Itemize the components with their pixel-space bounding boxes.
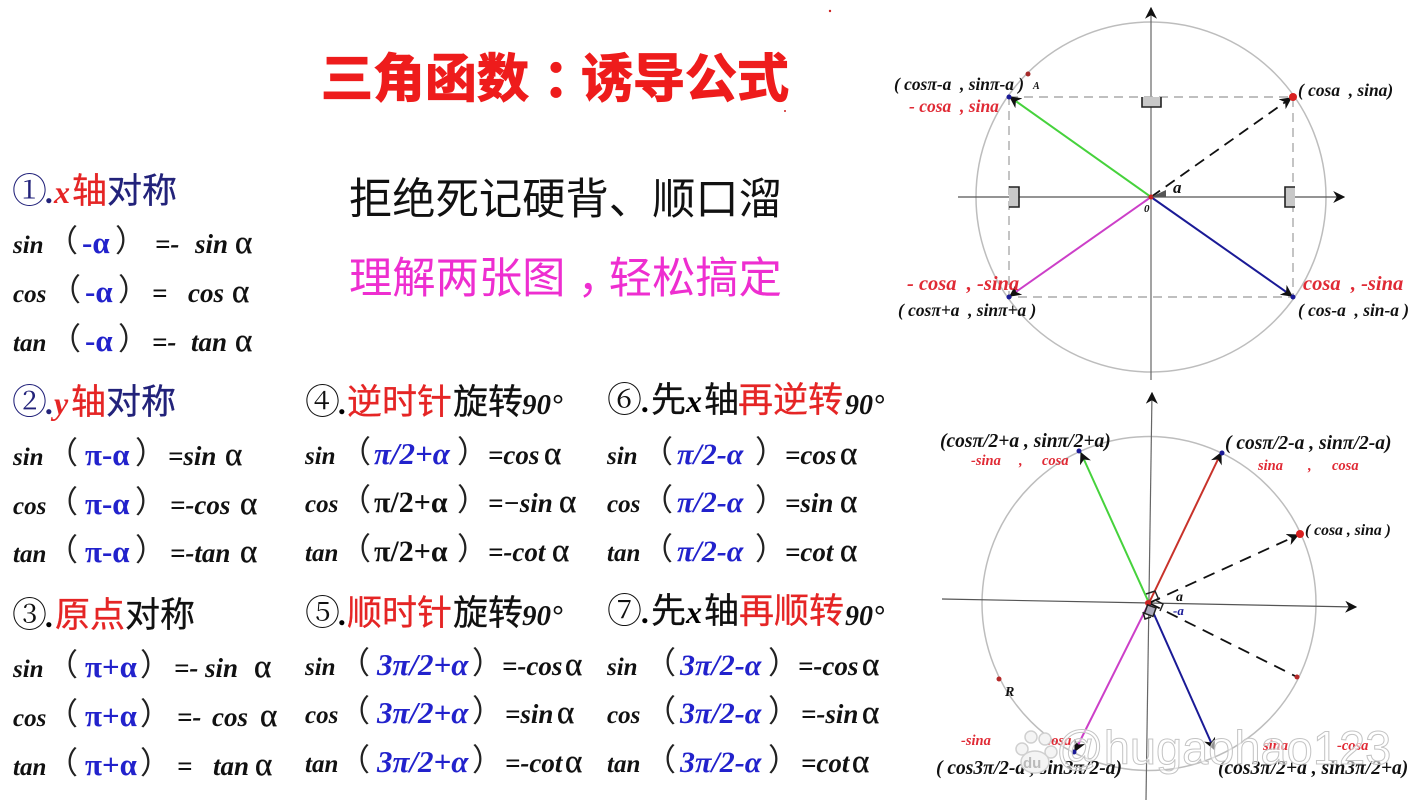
formula sin(pi/2+a): π/2+α (374, 436, 451, 471)
formula sin(pi-a): ） (135, 428, 166, 473)
heading 4: 逆时针 (347, 383, 452, 422)
heading 4: 旋转 (453, 383, 523, 422)
formula sin(pi/2-a): α (840, 436, 857, 472)
formula cos(3pi/2-a): 3π/2-α (679, 697, 762, 730)
heading 3: 对称 (125, 596, 195, 635)
formula cos(pi/2-a): cos (607, 491, 640, 518)
formula sin(pi/2+a): ） (457, 427, 488, 472)
label red -sina cosa left: , (1018, 453, 1023, 469)
formula tan(3pi/2-a): =cot (801, 748, 851, 778)
label red cosa -sina: cosa , -sina (1303, 273, 1403, 295)
formula sin(-a): α (235, 225, 252, 261)
formula cos(pi+a): =- (177, 702, 201, 732)
formula tan(pi/2-a): α (840, 533, 857, 569)
formula tan(pi-a): ） (135, 525, 166, 570)
label pi/2-a coordinates: ( cosπ/2-a , sinπ/2-a) (1225, 433, 1391, 454)
panel: rule 5 clockwise 90 (304, 586, 582, 780)
formula cos(pi-a): =-cos (170, 490, 230, 520)
formula sin(pi+a): α (254, 649, 271, 685)
formula sin(3pi/2-a): （ (645, 638, 676, 683)
heading 5: ⑤ (305, 586, 340, 636)
formula tan(3pi/2+a): α (565, 744, 582, 780)
formula tan(pi/2-a): tan (607, 540, 640, 567)
formula cos(3pi/2+a): 3π/2+α (376, 695, 469, 730)
formula sin(pi+a): π+α (85, 649, 137, 684)
formula sin(pi/2-a): ） (755, 427, 786, 472)
heading 5: 90° (522, 600, 563, 632)
label 3pi/2-a coordinates: ( cos3π/2-a , sin3π/2-a) (936, 758, 1122, 779)
formula cos(pi/2+a): π/2+α (374, 486, 448, 519)
formula sin(pi/2-a): （ (642, 427, 673, 472)
heading 7: 轴 (704, 592, 739, 631)
tagline: no rote memorization: 拒绝死记硬背、顺口溜 (349, 165, 782, 227)
x axis (958, 196, 1344, 198)
label red -cosa sina: - cosa , sina (909, 96, 999, 116)
formula tan(pi/2+a): π/2+α (374, 535, 448, 568)
formula tan(pi+a): tan (213, 751, 249, 781)
watermark: paw logo: du (1023, 755, 1041, 772)
watermark: handle: @hugaohao123 (1056, 721, 1391, 774)
label 3pi/2+a coordinates: (cos3π/2+a , sin3π/2+a) (1218, 758, 1408, 779)
panel: rule 2 y-axis symmetry (12, 375, 257, 570)
formula cos(pi+a): ） (140, 689, 171, 734)
formula sin(3pi/2-a): =-cos (798, 651, 858, 681)
formula tan(-a): tan (191, 327, 227, 357)
panel: rule 6 x-axis then counter-rotate 90 (606, 373, 884, 569)
formula tan(-a): tan (13, 330, 46, 357)
formula sin(pi/2+a): sin (304, 443, 336, 470)
title: 三角函数 ：诱导公式 (321, 37, 789, 112)
heading 6: 轴 (704, 381, 739, 420)
panel: rule 3 origin symmetry (12, 588, 277, 783)
label -a coordinates: ( cos-a , sin-a ) (1298, 300, 1409, 320)
formula sin(pi/2-a): sin (606, 443, 638, 470)
formula cos(pi/2-a): α (840, 484, 857, 520)
label pi+a coordinates: ( cosπ+a , sinπ+a ) (898, 300, 1036, 320)
formula cos(3pi/2+a): （ (339, 686, 370, 731)
formula sin(pi/2-a): π/2-α (677, 438, 744, 471)
formula tan(-a): ） (118, 314, 149, 359)
label red sina -cosa right: -cosa (1337, 738, 1368, 754)
y axis (1146, 393, 1152, 800)
label pi/2+a coordinates: (cosπ/2+a , sinπ/2+a) (940, 431, 1111, 452)
formula cos(3pi/2-a): α (862, 695, 879, 731)
blue vector (1151, 197, 1292, 296)
stray specks (784, 10, 831, 112)
formula sin(pi/2+a): α (544, 436, 561, 472)
formula sin(3pi/2+a): ） (472, 638, 503, 683)
formula cos(-a): -α (85, 274, 113, 309)
formula cos(3pi/2+a): α (557, 695, 574, 731)
heading 5: . (339, 596, 347, 632)
formula cos(3pi/2+a): cos (305, 702, 338, 729)
formula tan(3pi/2+a): =-cot (505, 748, 564, 778)
formula tan(pi+a): = (177, 751, 192, 781)
formula tan(pi/2-a): =cot (785, 537, 835, 567)
formula cos(-a): α (232, 274, 249, 310)
formula sin(3pi/2+a): =-cos (502, 651, 562, 681)
formula tan(pi-a): α (240, 534, 257, 570)
panel: rule 7 x-axis then clockwise 90 (606, 584, 884, 780)
formula sin(pi-a): sin (12, 444, 44, 471)
x axis (942, 599, 1356, 607)
formula cos(-a): cos (13, 281, 46, 308)
label A: A (1032, 81, 1040, 92)
formula tan(3pi/2-a): α (852, 744, 869, 780)
formula cos(pi-a): π-α (85, 486, 130, 521)
formula sin(pi+a): ） (140, 640, 171, 685)
formula tan(pi-a): （ (47, 525, 78, 570)
formula tan(3pi/2-a): tan (607, 751, 640, 778)
green vector (1010, 97, 1151, 197)
formula cos(pi/2+a): （ (340, 475, 371, 520)
formula tan(pi+a): tan (13, 754, 46, 781)
formula tan(pi/2-a): ） (755, 524, 786, 569)
formula tan(3pi/2+a): ） (472, 735, 503, 780)
formula sin(pi-a): π-α (85, 437, 130, 472)
formula tan(pi/2-a): （ (642, 524, 673, 569)
chart: unit circle rotation diagram (936, 393, 1408, 800)
heading 4: . (339, 385, 347, 421)
label red -sina -cosa left: -sina (961, 733, 991, 749)
formula tan(-a): α (235, 323, 252, 359)
formula tan(pi/2+a): =-cot (488, 537, 547, 567)
points on circle (996, 448, 1304, 754)
label cosa sina: ( cosa , sina ) (1305, 522, 1391, 539)
heading 6: 90° (845, 390, 884, 421)
formula sin(-a): （ (47, 216, 78, 261)
formula tan(pi+a): ） (140, 738, 171, 783)
formula cos(pi/2-a): （ (642, 475, 673, 520)
heading 2: . (46, 385, 54, 421)
label red sina cosa right: , (1307, 458, 1312, 474)
label red -sina cosa left: cosa (1042, 453, 1069, 469)
heading 6: . (642, 383, 650, 419)
formula cos(pi/2+a): α (559, 484, 576, 520)
heading 6: 先 (651, 381, 686, 420)
formula sin(3pi/2-a): α (862, 647, 879, 683)
heading 2: y (50, 385, 69, 421)
heading 6: 再逆转 (738, 381, 843, 420)
heading 3: . (46, 598, 54, 634)
formula sin(3pi/2-a): 3π/2-α (679, 649, 762, 682)
heading 7: 再顺转 (739, 592, 844, 631)
formula cos(3pi/2-a): ） (768, 686, 799, 731)
heading 7: 先 (651, 592, 686, 631)
formula cos(pi/2-a): π/2-α (677, 486, 744, 519)
heading 7: x (685, 594, 702, 630)
formula sin(3pi/2-a): ） (768, 638, 799, 683)
formula cos(pi-a): （ (47, 477, 78, 522)
heading 6: ⑥ (607, 373, 642, 423)
formula cos(-a): ） (118, 265, 149, 310)
formula sin(pi/2-a): =cos (785, 440, 836, 470)
formula tan(-a): -α (85, 323, 113, 358)
heading 7: ⑦ (607, 584, 642, 634)
formula tan(3pi/2+a): （ (339, 735, 370, 780)
dashed vector to (cosa, sina) (1151, 98, 1291, 197)
formula tan(3pi/2+a): tan (305, 751, 338, 778)
formula cos(pi+a): cos (13, 705, 46, 732)
formula cos(3pi/2+a): =sin (505, 699, 553, 729)
dashed vector to lower right (1149, 603, 1297, 677)
formula cos(3pi/2+a): ） (472, 686, 503, 731)
heading 2: 对称 (106, 383, 176, 422)
formula sin(pi+a): sin (12, 656, 44, 683)
heading 4: ④ (305, 375, 340, 425)
heading 1: 轴 (72, 172, 107, 211)
heading 2: 轴 (71, 383, 106, 422)
formula tan(pi+a): α (255, 747, 272, 783)
formula sin(pi/2+a): =cos (488, 440, 539, 470)
magenta vector (1010, 197, 1151, 296)
formula sin(-a): -α (82, 225, 110, 260)
formula tan(pi-a): π-α (85, 534, 130, 569)
red vector (1149, 453, 1221, 603)
blue vector (1149, 603, 1214, 749)
heading 6: x (685, 383, 702, 419)
heading 1: 对称 (107, 172, 177, 211)
formula cos(pi-a): cos (13, 493, 46, 520)
heading 4: 90° (522, 389, 563, 421)
formula sin(pi-a): （ (47, 428, 78, 473)
formula cos(3pi/2-a): =-sin (801, 699, 858, 729)
heading 7: . (642, 594, 650, 630)
label red -cosa -sina: - cosa , -sina (907, 273, 1019, 295)
formula tan(3pi/2+a): 3π/2+α (376, 744, 469, 779)
label origin: 0 (1144, 203, 1150, 215)
label red -sina cosa left: -sina (971, 453, 1001, 469)
formula sin(pi-a): =sin (168, 441, 216, 471)
formula sin(pi+a): =- (174, 653, 198, 683)
formula sin(3pi/2+a): sin (304, 654, 336, 681)
formula sin(-a): sin (12, 232, 44, 259)
formula tan(3pi/2-a): ） (768, 735, 799, 780)
watermark: paw logo (1016, 731, 1057, 773)
magenta vector (1075, 603, 1149, 751)
label red sina -cosa right: sina (1262, 738, 1288, 754)
formula sin(3pi/2+a): 3π/2+α (376, 647, 469, 682)
formula cos(-a): （ (50, 265, 81, 310)
formula cos(-a): cos (188, 278, 224, 308)
label R: R (1004, 685, 1014, 700)
panel: rule 4 counter-clockwise 90 (304, 375, 576, 569)
formula tan(-a): =- (152, 327, 176, 357)
formula sin(-a): ） (115, 216, 146, 261)
heading 5: 旋转 (453, 594, 523, 633)
formula sin(pi+a): （ (47, 640, 78, 685)
label -a: -a (1173, 603, 1184, 618)
angle marks at origin (1143, 591, 1163, 619)
formula tan(pi/2-a): π/2-α (677, 535, 744, 568)
label red -sina -cosa left: -cosa (1040, 733, 1071, 749)
label pi-a coordinates: ( cosπ-a , sinπ-a ) (894, 74, 1024, 94)
green vector (1081, 453, 1149, 603)
formula tan(pi/2+a): （ (340, 524, 371, 569)
formula tan(pi+a): （ (47, 738, 78, 783)
label alpha: a (1173, 178, 1182, 197)
heading 2: ② (12, 375, 47, 425)
heading 3: 原点 (55, 596, 125, 635)
heading 7: 90° (845, 601, 884, 632)
label a: a (1176, 590, 1183, 605)
formula cos(3pi/2-a): cos (607, 702, 640, 729)
formula sin(3pi/2-a): sin (606, 654, 638, 681)
formula sin(-a): sin (194, 229, 228, 259)
formula cos(pi/2-a): =sin (785, 488, 833, 518)
heading 5: 顺时针 (347, 594, 452, 633)
formula cos(pi+a): （ (47, 689, 78, 734)
formula tan(pi/2+a): ） (457, 524, 488, 569)
heading 3: ③ (12, 588, 47, 638)
heading 1: ① (12, 164, 47, 214)
formula sin(pi/2+a): （ (340, 427, 371, 472)
points on circle (1006, 72, 1297, 300)
formula sin(pi+a): sin (204, 653, 238, 683)
label red sina cosa right: cosa (1332, 458, 1359, 474)
formula cos(pi/2+a): ） (457, 475, 488, 520)
right-angle marks (1009, 97, 1295, 207)
formula cos(pi/2+a): cos (305, 491, 338, 518)
formula tan(-a): （ (50, 314, 81, 359)
formula tan(pi/2+a): tan (305, 540, 338, 567)
formula sin(3pi/2+a): α (565, 647, 582, 683)
dashed vector to (cosa, sina) (1149, 535, 1298, 603)
formula cos(pi+a): cos (212, 702, 248, 732)
angle wedge (1151, 190, 1166, 197)
formula cos(pi-a): α (240, 486, 257, 522)
formula tan(3pi/2-a): （ (645, 735, 676, 780)
formula cos(pi-a): ） (135, 477, 166, 522)
formula cos(pi/2+a): =−sin (488, 488, 553, 518)
formula cos(pi/2-a): ） (755, 475, 786, 520)
chart: unit circle symmetry diagram (894, 8, 1409, 380)
formula tan(pi-a): tan (13, 541, 46, 568)
y axis (1150, 8, 1152, 380)
formula cos(3pi/2-a): （ (645, 686, 676, 731)
label red sina cosa right: sina (1257, 458, 1283, 474)
label cosa sina: ( cosa , sina) (1298, 80, 1393, 100)
panel: rule 1 x-axis symmetry (12, 164, 252, 359)
formula sin(pi-a): α (225, 437, 242, 473)
formula tan(pi-a): =-tan (170, 538, 230, 568)
heading 1: . (46, 174, 54, 210)
formula cos(pi+a): α (260, 698, 277, 734)
formula cos(-a): = (152, 278, 167, 308)
formula tan(pi/2+a): α (552, 533, 569, 569)
formula sin(3pi/2+a): （ (339, 638, 370, 683)
formula cos(pi+a): π+α (85, 698, 137, 733)
formula tan(pi+a): π+α (85, 747, 137, 782)
formula tan(3pi/2-a): 3π/2-α (679, 746, 762, 779)
heading 1: x (53, 174, 70, 210)
tagline: understand two diagrams: 理解两张图 ，轻松搞定 (349, 244, 782, 306)
formula sin(-a): =- (155, 229, 179, 259)
